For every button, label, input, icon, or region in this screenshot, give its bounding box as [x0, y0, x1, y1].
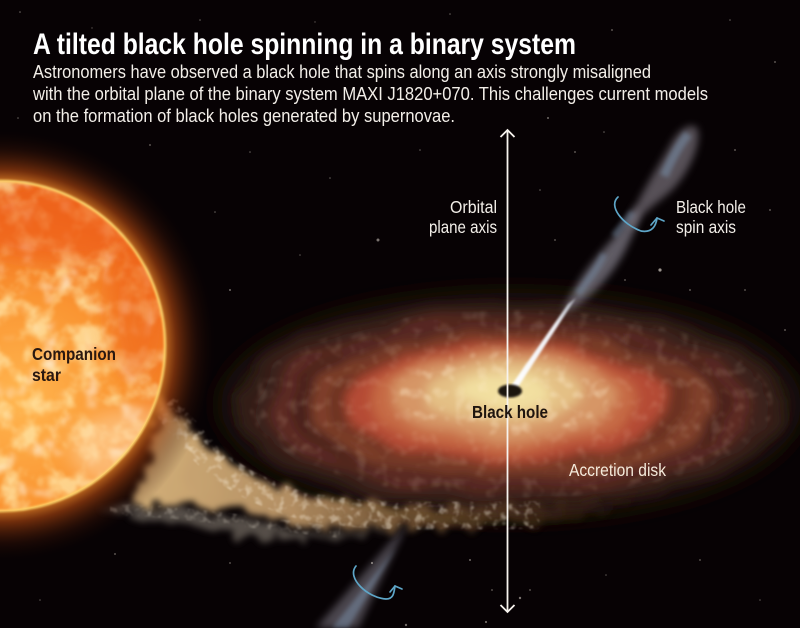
upper jet along the black hole spin axis	[511, 126, 698, 390]
label: companion star: star	[32, 365, 61, 385]
label: companion star	[32, 344, 116, 385]
label: orbital plane axis: plane axis	[429, 217, 497, 237]
lower jet	[316, 522, 408, 628]
label: companion star: Companion	[32, 344, 116, 364]
title: A tilted black hole spinning in a binary system	[33, 28, 576, 61]
spin arrow: lower	[353, 566, 402, 599]
label: black hole spin axis: spin axis	[676, 217, 736, 237]
label: orbital plane axis	[429, 197, 497, 237]
disk grain texture	[249, 310, 773, 498]
orbital plane axis arrow	[500, 130, 514, 612]
label: orbital plane axis: Orbital	[450, 197, 497, 217]
label: black hole spin axis	[676, 197, 746, 237]
label: black hole: Black hole	[472, 402, 548, 422]
mass stream from companion star to disk	[100, 395, 660, 540]
intro text: Astronomers have observed a black hole that spins along an axis strongly misaligned	[33, 61, 651, 82]
black hole	[498, 384, 522, 398]
intro text: on the formation of black holes generated by supernovae.	[33, 105, 455, 126]
spin arrow: upper	[615, 197, 664, 231]
intro text	[32, 61, 708, 126]
companion star	[0, 131, 215, 561]
intro text: with the orbital plane of the binary system MAXI J1820+070. This challenges current models	[32, 83, 708, 104]
accretion disk	[221, 293, 800, 517]
label: black hole spin axis: Black hole	[676, 197, 746, 217]
label: accretion disk: Accretion disk	[569, 460, 666, 480]
